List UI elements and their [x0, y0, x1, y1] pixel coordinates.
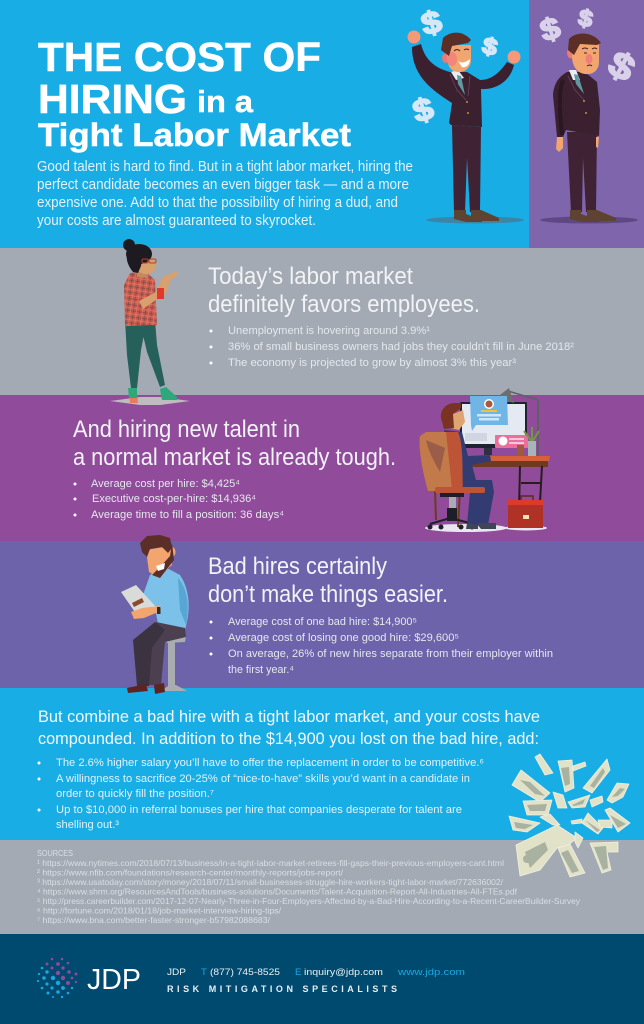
sources list: ⁶ http://fortune.com/2018/01/18/job-market-interview-hiring-tips/ [37, 906, 282, 916]
intro paragraph: perfect candidate becomes an even bigger task — and a more [37, 177, 409, 193]
footer contact line: E [295, 967, 301, 978]
illustration: happy businessman [408, 30, 524, 224]
footer contact line: JDP [167, 967, 186, 978]
bullet list: labor market facts: Unemployment is hovering around 3.9%¹ [228, 325, 430, 337]
panel: bad hires [0, 541, 644, 688]
bullet list: bad hire costs: On average, 26% of new hires separate from their employer within [228, 648, 553, 660]
illustration: recruiter at desk [419, 388, 550, 532]
illustration: sad businessman [540, 33, 638, 223]
heading: combined costs: But combine a bad hire with a tight labor market, and your costs have [38, 708, 540, 726]
footer contact line: inquiry@jdp.com [304, 967, 383, 978]
bullet list: bad hire costs: the first year.⁴ [228, 664, 294, 676]
bullet list: hiring costs: Average time to fill a position: 36 days⁴ [91, 509, 284, 521]
icon: JDP dot sphere [37, 958, 78, 998]
heading: labor market favors employees [208, 263, 480, 318]
panel: hero purple column [529, 0, 644, 248]
intro paragraph: your costs are almost guaranteed to skyrocket. [37, 213, 316, 229]
sources list: ⁴ https://www.shrm.org/ResourcesAndTools/business-solutions/Documents/Talent-Acquisition-Report-All-Industries-All-FTEs.pdf [37, 886, 518, 896]
bullet list: hiring costs: Average cost per hire: $4,425⁴ [91, 478, 240, 490]
panel: footer [0, 934, 644, 1024]
sources list: ⁷ https://www.bna.com/better-faster-stronger-b57982088683/ [37, 915, 271, 925]
logo: JDP: JDP [87, 964, 141, 996]
bullet list: added costs: A willingness to sacrifice 20-25% of “nice-to-have” skills you’d want in a candidate in [56, 773, 470, 785]
icon: floating dollar signs, sad side [536, 5, 641, 90]
footer contact line: www.jdp.com [397, 967, 465, 978]
title: THE COST OF [38, 34, 321, 80]
bullet list: bad hire costs: Average cost of losing one good hire: $29,600⁵ [228, 632, 459, 644]
bullet list: labor market facts: The economy is projected to grow by almost 3% this year³ [228, 357, 516, 369]
footer contact line [167, 967, 465, 978]
bullet list: added costs: shelling out.³ [56, 819, 119, 831]
icon: floating dollar signs, happy side: $ [418, 4, 446, 43]
title: HIRING [38, 76, 187, 122]
icon: floating dollar signs, happy side: $ [409, 91, 438, 130]
intro paragraph [37, 159, 413, 229]
icon: floating dollar signs, happy side [409, 4, 500, 130]
heading: labor market favors employees: Today’s labor market [208, 263, 413, 290]
bullet list: added costs: order to quickly fill the position.⁷ [56, 788, 214, 800]
heading: hiring in a normal market: And hiring new talent in [73, 416, 300, 443]
panel: hero background [0, 0, 529, 248]
bullet list: added costs [38, 757, 484, 831]
panel: combined costs [0, 688, 644, 840]
heading: bad hires [208, 553, 448, 608]
bullet list: added costs: The 2.6% higher salary you’ll have to offer the replacement in order to be competitive.⁶ [56, 757, 484, 769]
footer contact line: T [201, 967, 207, 978]
bullet list: bad hire costs [210, 616, 553, 676]
panel: labor market favors employees [0, 248, 644, 395]
heading: bad hires: don’t make things easier. [208, 581, 448, 608]
bullet list: added costs: Up to $10,000 in referral bonuses per hire that companies desperate for talent are [56, 804, 462, 816]
sources list: ³ https://www.usatoday.com/story/money/2018/07/11/small-businesses-struggle-hire-workers-tight-labor-market/772636002/ [37, 877, 504, 887]
illustration: woman with coffee cup [110, 239, 190, 405]
heading: bad hires: Bad hires certainly [208, 553, 387, 580]
heading: combined costs: compounded. In addition to the $14,900 you lost on the bad hire, add: [38, 730, 539, 748]
icon: floating dollar signs, sad side: $ [536, 10, 564, 48]
heading: hiring in a normal market [73, 416, 396, 471]
title: Tight Labor Market [38, 117, 351, 153]
logo: JDP [37, 958, 141, 998]
bullet list: labor market facts [210, 325, 574, 369]
footer tagline: RISK MITIGATION SPECIALISTS [167, 984, 397, 994]
sources list [37, 848, 581, 925]
title [38, 34, 351, 153]
heading: labor market favors employees: definitely favors employees. [208, 291, 480, 318]
sources list: ¹ https://www.nytimes.com/2018/07/13/business/in-a-tight-labor-market-retirees-fill-gaps-their-previous-employers-cant.html [37, 858, 504, 868]
illustration: frustrated man with tablet [121, 535, 189, 694]
sources list: ² https://www.nfib.com/foundations/research-center/monthly-reports/jobs-report/ [37, 868, 344, 878]
sources list: ⁵ http://press.careerbuilder.com/2017-12-07-Nearly-Three-in-Four-Employers-Affected-by-a-Bad-Hire-According-to-a-Recent-CareerBuilder-Survey [37, 896, 581, 906]
panel: sources [0, 840, 644, 934]
heading: combined costs [38, 708, 540, 748]
illustration: falling money [509, 754, 630, 877]
title: in a [197, 84, 254, 119]
bullet list: labor market facts: 36% of small business owners had jobs they couldn’t fill in June 2018² [228, 341, 574, 353]
bullet list: hiring costs [74, 478, 284, 521]
bullet list: bad hire costs: Average cost of one bad hire: $14,900⁵ [228, 616, 417, 628]
icon: floating dollar signs, happy side: $ [480, 33, 500, 61]
footer contact line: (877) 745-8525 [210, 967, 280, 978]
intro paragraph: expensive one. Add to that the possibility of hiring a dud, and [37, 195, 398, 211]
heading: hiring in a normal market: a normal market is already tough. [73, 444, 396, 471]
icon: floating dollar signs, sad side: $ [602, 43, 641, 90]
panel: hiring in a normal market [0, 395, 644, 541]
intro paragraph: Good talent is hard to find. But in a tight labor market, hiring the [37, 159, 413, 175]
bullet list: hiring costs: Executive cost-per-hire: $14,936⁴ [92, 493, 256, 505]
icon: floating dollar signs, sad side: $ [576, 5, 596, 33]
sources list: SOURCES [37, 848, 73, 858]
